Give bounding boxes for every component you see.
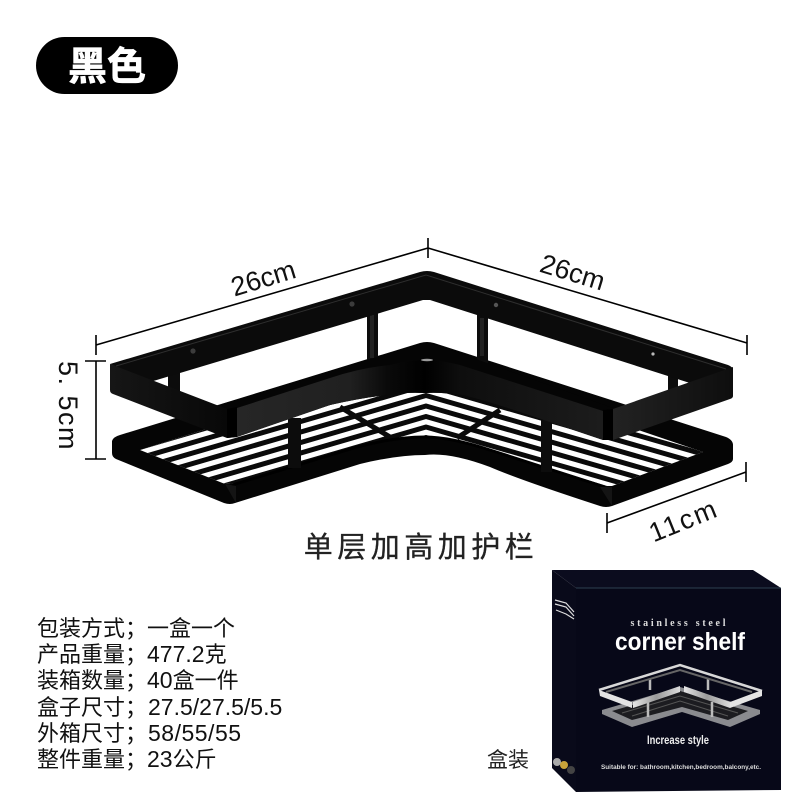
dimension: left width 26cm: [96, 248, 428, 355]
support posts: [168, 305, 678, 472]
box colour swatches: [553, 758, 575, 774]
specification list: 477.2克: [147, 641, 227, 667]
box text: suitable for: Suitable for: bathroom,kitchen,bedroom,balcony,etc.: [601, 764, 761, 771]
specification list: 一盒一个: [147, 616, 235, 641]
dimension: height 5.5cm: 5. 5cm: [53, 361, 83, 451]
box side icon: [555, 600, 574, 619]
product box: [552, 570, 781, 792]
box text: corner shelf: corner shelf: [615, 628, 746, 656]
box faces: [552, 570, 781, 792]
specification list: 盒子尺寸；: [37, 695, 147, 720]
mini back rim: [599, 665, 762, 691]
mini front bands: [599, 690, 762, 708]
specification list: 包装方式；: [37, 616, 147, 641]
top frame front rim and curved bands: [222, 342, 613, 440]
dimension: depth 11cm: 11cm: [645, 493, 723, 548]
specification list: 产品重量；: [37, 642, 147, 667]
specification list: 27.5/27.5/5.5: [148, 694, 282, 720]
dimension: left width 26cm: 26cm: [227, 254, 299, 302]
top frame end faces: [110, 364, 733, 440]
box label: 盒装: [487, 749, 529, 772]
product: black corner shelf: [110, 271, 733, 507]
bottom tray: [112, 342, 733, 507]
specification list: 装箱数量；: [37, 668, 147, 693]
specification list: 58/55/55: [148, 720, 242, 746]
mini tray: [602, 687, 760, 727]
dimension: right width 26cm: 26cm: [537, 248, 609, 296]
specification list: 外箱尺寸；: [37, 721, 147, 746]
dimension: height 5.5cm: [53, 361, 106, 459]
dimension: depth 11cm: [607, 462, 746, 548]
title badge: 黑色: [68, 46, 146, 89]
box shelf image: [599, 665, 762, 727]
title badge: [36, 37, 178, 94]
dimension: right width 26cm: [428, 238, 747, 355]
caption: 单层加高加护栏: [304, 531, 538, 564]
box text: stainless steel: stainless steel: [630, 618, 726, 629]
specification list: [37, 616, 282, 772]
top frame back walls: [110, 271, 733, 384]
specification list: 40盒一件: [147, 667, 239, 693]
specification list: 整件重量；: [37, 747, 147, 772]
mini posts: [648, 679, 712, 717]
specification list: 23公斤: [147, 746, 217, 772]
box text: Increase style: Increase style: [647, 733, 709, 747]
